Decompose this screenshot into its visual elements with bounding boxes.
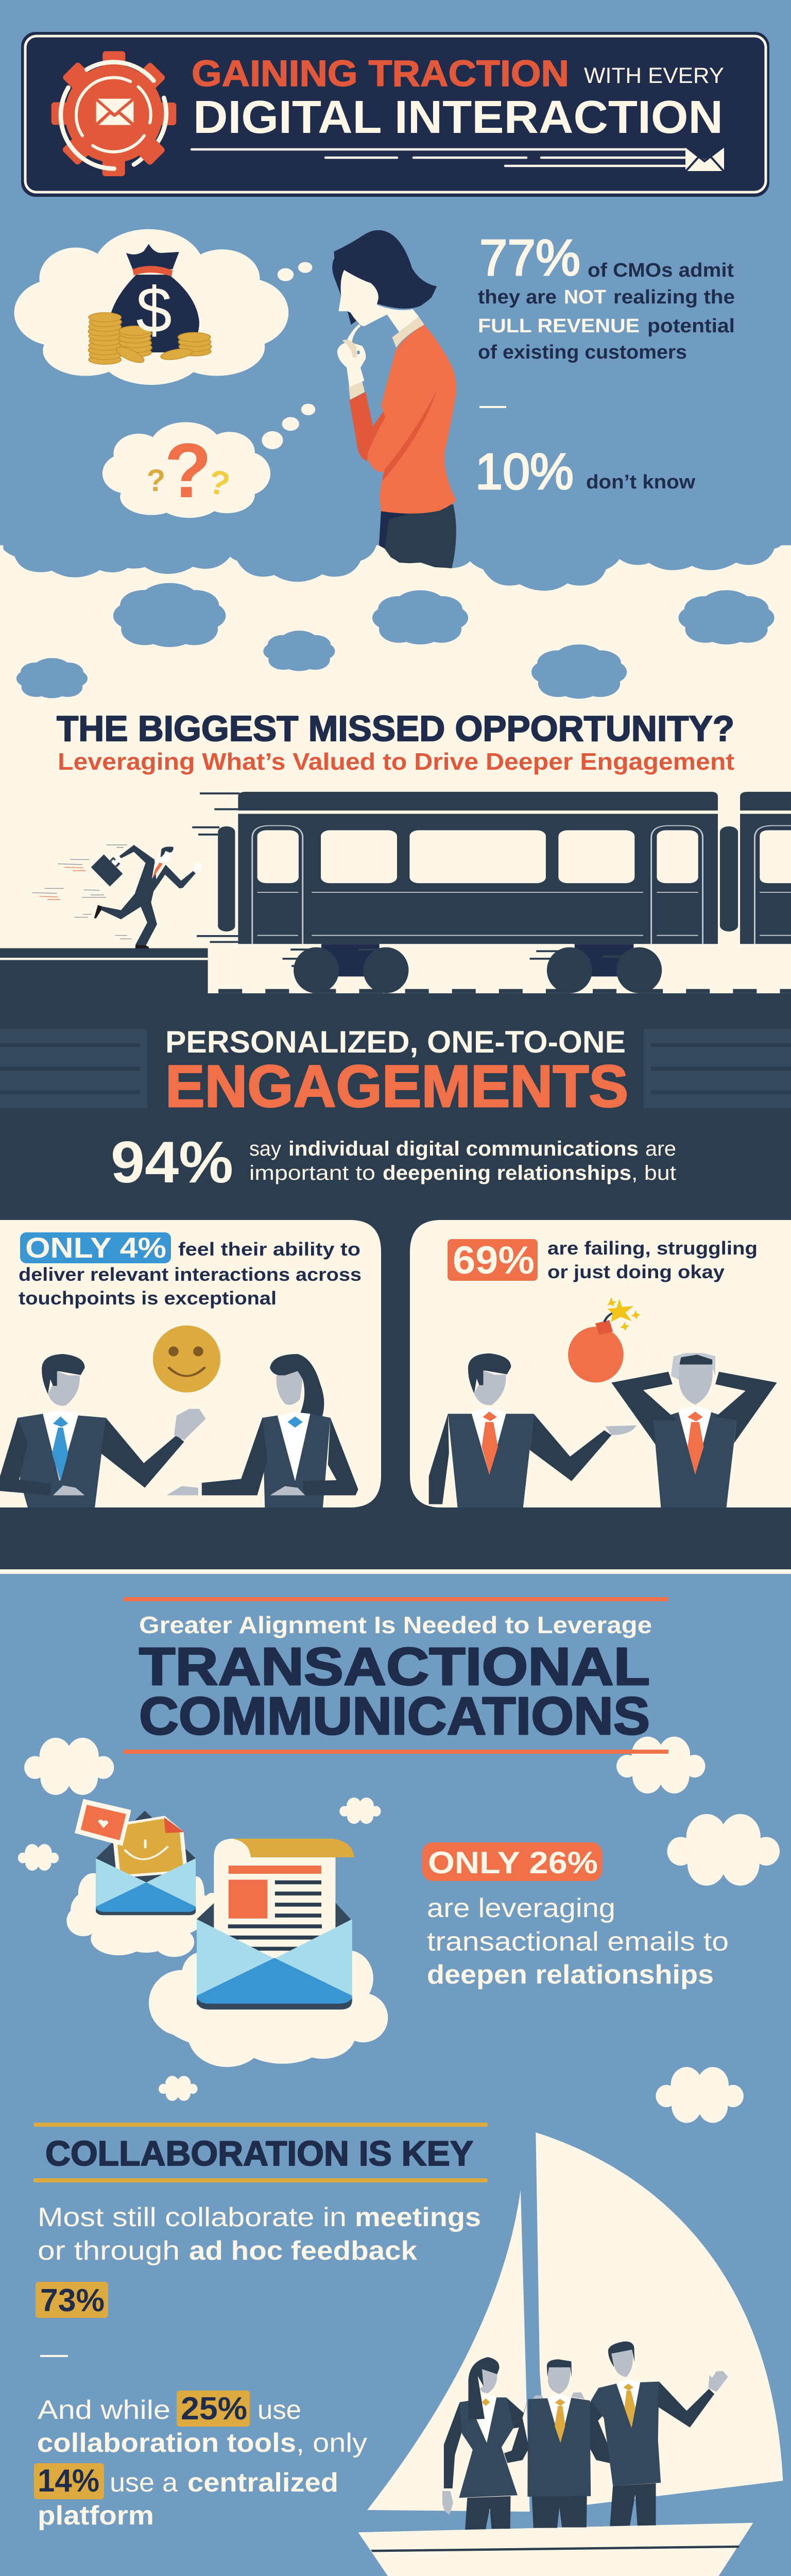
collaboration text	[38, 2202, 481, 2266]
heading: transactional communications: TRANSACTIONAL	[139, 1637, 650, 1696]
badge: 69 percent: 69%	[453, 1239, 535, 1282]
sweater	[368, 325, 456, 514]
blue clouds on cream	[16, 583, 775, 699]
email envelopes on clouds	[66, 1799, 388, 2067]
engagement banner	[0, 1025, 791, 1120]
stat: 77 percent: of CMOs admit	[588, 260, 734, 281]
lips	[348, 312, 356, 325]
businessman with orange tie	[429, 1353, 637, 1507]
stat: only 26 percent	[422, 1842, 729, 1990]
stat: 77 percent: realizing the	[613, 286, 735, 308]
stat: 94 percent: important to	[249, 1162, 375, 1184]
sweater fold	[382, 391, 437, 482]
sails	[367, 2132, 783, 2512]
collaboration tools text: platform	[38, 2501, 154, 2531]
title line one: GAINING TRACTION	[192, 54, 569, 94]
badge: 73 percent: 73%	[40, 2283, 105, 2318]
track sleepers	[218, 989, 791, 993]
stat: 77 percent: FULL REVENUE	[478, 315, 640, 337]
divider dash	[479, 406, 506, 408]
heading: biggest missed opportunity	[57, 708, 734, 775]
stat: 94 percent: are	[645, 1138, 676, 1160]
shoes	[94, 905, 149, 948]
heading: biggest missed opportunity: Leveraging What’s Valued to Drive Deeper Engagement	[58, 748, 734, 775]
panel: only 4 percent	[0, 1220, 381, 1507]
heading: transactional communications	[123, 1597, 668, 1754]
stat: 10 percent: don’t know	[586, 471, 695, 493]
banner headline: PERSONALIZED, ONE-TO-ONE	[165, 1025, 626, 1059]
title line one: WITH EVERY	[584, 63, 724, 88]
title line one	[192, 54, 724, 94]
speed lines and envelope	[192, 146, 724, 172]
icon: bomb	[568, 1297, 641, 1383]
running businessman	[32, 845, 202, 948]
businessman centre	[504, 2359, 611, 2528]
question marks: ?	[205, 462, 233, 503]
thought cloud: money	[14, 229, 312, 385]
tie	[152, 862, 163, 879]
stat: only 26 percent: transactional emails to	[427, 1927, 729, 1957]
train windows	[257, 831, 791, 883]
motion lines	[32, 845, 132, 939]
stat: only 26 percent: are leveraging	[427, 1893, 615, 1923]
stat: 94 percent: say	[249, 1138, 281, 1160]
stat: 10 percent: 10%	[475, 443, 574, 500]
heading: collaboration is key	[33, 2123, 488, 2182]
businesswoman	[442, 2357, 524, 2530]
train door lines	[252, 826, 791, 944]
hull	[358, 2523, 753, 2576]
panel: 69 percent	[410, 1220, 791, 1507]
stat: 77 percent: they are	[478, 286, 557, 308]
stat: 77 percent	[478, 229, 735, 363]
icon: smiley face	[153, 1326, 220, 1393]
stat: 77 percent: NOT	[564, 286, 606, 308]
stat: 10 percent	[475, 443, 695, 500]
banner side stripes	[0, 1029, 791, 1108]
stat: 77 percent: potential	[647, 315, 735, 337]
skirt	[379, 504, 456, 568]
divider dash	[40, 2355, 68, 2357]
sailboat	[358, 2132, 783, 2576]
stat: 94 percent: individual digital communications	[288, 1138, 639, 1160]
stressed businessman	[611, 1353, 777, 1507]
businessman with blue tie	[0, 1354, 206, 1507]
white clouds	[18, 1737, 780, 2123]
stat: 94 percent: 94%	[111, 1130, 233, 1195]
heading: transactional communications: COMMUNICATIONS	[139, 1686, 650, 1745]
icon: gear with envelope	[51, 51, 176, 176]
station platform	[0, 948, 208, 994]
head and hands	[111, 850, 202, 878]
badge: only 4 percent: ONLY 4%	[25, 1231, 166, 1264]
stat: 94 percent: , but	[631, 1162, 676, 1184]
face and neck	[337, 270, 419, 387]
panel text: deliver relevant interactions across	[19, 1264, 362, 1285]
question marks: ?	[147, 463, 165, 498]
train cars	[192, 792, 791, 944]
team of three on boat	[442, 2342, 728, 2530]
collaboration text: Most still collaborate in	[38, 2202, 347, 2232]
heading: transactional communications: Greater Alignment Is Needed to Leverage	[139, 1612, 652, 1638]
stat: 94 percent: deepening relationships	[383, 1162, 631, 1184]
badge: 25 percent: 25%	[181, 2391, 247, 2427]
stat: 94 percent	[111, 1130, 676, 1195]
banner keyword: ENGAGEMENTS	[165, 1054, 628, 1120]
stat: only 26 percent: deepen relationships	[427, 1960, 714, 1990]
collar and cuff	[349, 317, 424, 400]
suit	[101, 845, 196, 945]
question marks: ?	[164, 427, 212, 514]
collaboration text: or through	[38, 2236, 180, 2266]
train	[0, 792, 791, 994]
collaboration tools text: centralized	[187, 2468, 338, 2498]
cloud behind large envelope	[149, 1951, 388, 2067]
collaboration text: ad hoc feedback	[189, 2236, 417, 2266]
header banner	[21, 32, 769, 197]
panel text: are failing, struggling	[547, 1238, 758, 1259]
badge: 14 percent: 14%	[38, 2463, 99, 2499]
panel text: touchpoints is exceptional	[19, 1287, 277, 1309]
icon: coins	[88, 313, 211, 365]
blue cloud edge over cream	[0, 522, 791, 591]
collaboration tools text: collaboration tools	[37, 2428, 296, 2458]
hair	[332, 230, 437, 309]
thought cloud: question	[102, 404, 315, 518]
question marks	[147, 427, 233, 514]
hull stripe	[371, 2546, 739, 2552]
businesswoman with blue tie	[166, 1354, 358, 1507]
stat: 77 percent: 77%	[479, 229, 580, 286]
panel text	[19, 1239, 362, 1309]
hair	[161, 846, 174, 857]
title line two: DIGITAL INTERACTION	[193, 92, 723, 143]
large envelope	[197, 1839, 354, 2009]
collaboration tools text	[34, 2391, 367, 2531]
panel text: or just doing okay	[547, 1261, 725, 1282]
collaboration tools text: , only	[296, 2428, 367, 2458]
businessman waving	[590, 2342, 728, 2526]
dollar sign: $	[136, 275, 172, 346]
stat: 77 percent: of existing customers	[478, 342, 687, 363]
collaboration tools text: use	[257, 2395, 301, 2425]
collaboration tools text: use a	[110, 2468, 178, 2498]
heading: collaboration is key: COLLABORATION IS KEY	[45, 2134, 473, 2173]
sleeve back	[349, 392, 385, 461]
heading: biggest missed opportunity: THE BIGGEST MISSED OPPORTUNITY?	[57, 708, 734, 749]
briefcase	[91, 854, 123, 887]
stat: only 26 percent: ONLY 26%	[428, 1845, 598, 1880]
train wheels	[283, 944, 662, 993]
woman thinking figure	[332, 230, 456, 568]
icon: money bag	[109, 244, 199, 352]
panel text	[547, 1238, 758, 1282]
panel text: feel their ability to	[178, 1239, 360, 1260]
collaboration tools text: And while	[38, 2395, 170, 2425]
small envelope	[75, 1799, 196, 1915]
ring detail	[342, 340, 360, 358]
cloud behind small envelope	[66, 1873, 222, 1957]
collaboration text: meetings	[355, 2202, 481, 2232]
